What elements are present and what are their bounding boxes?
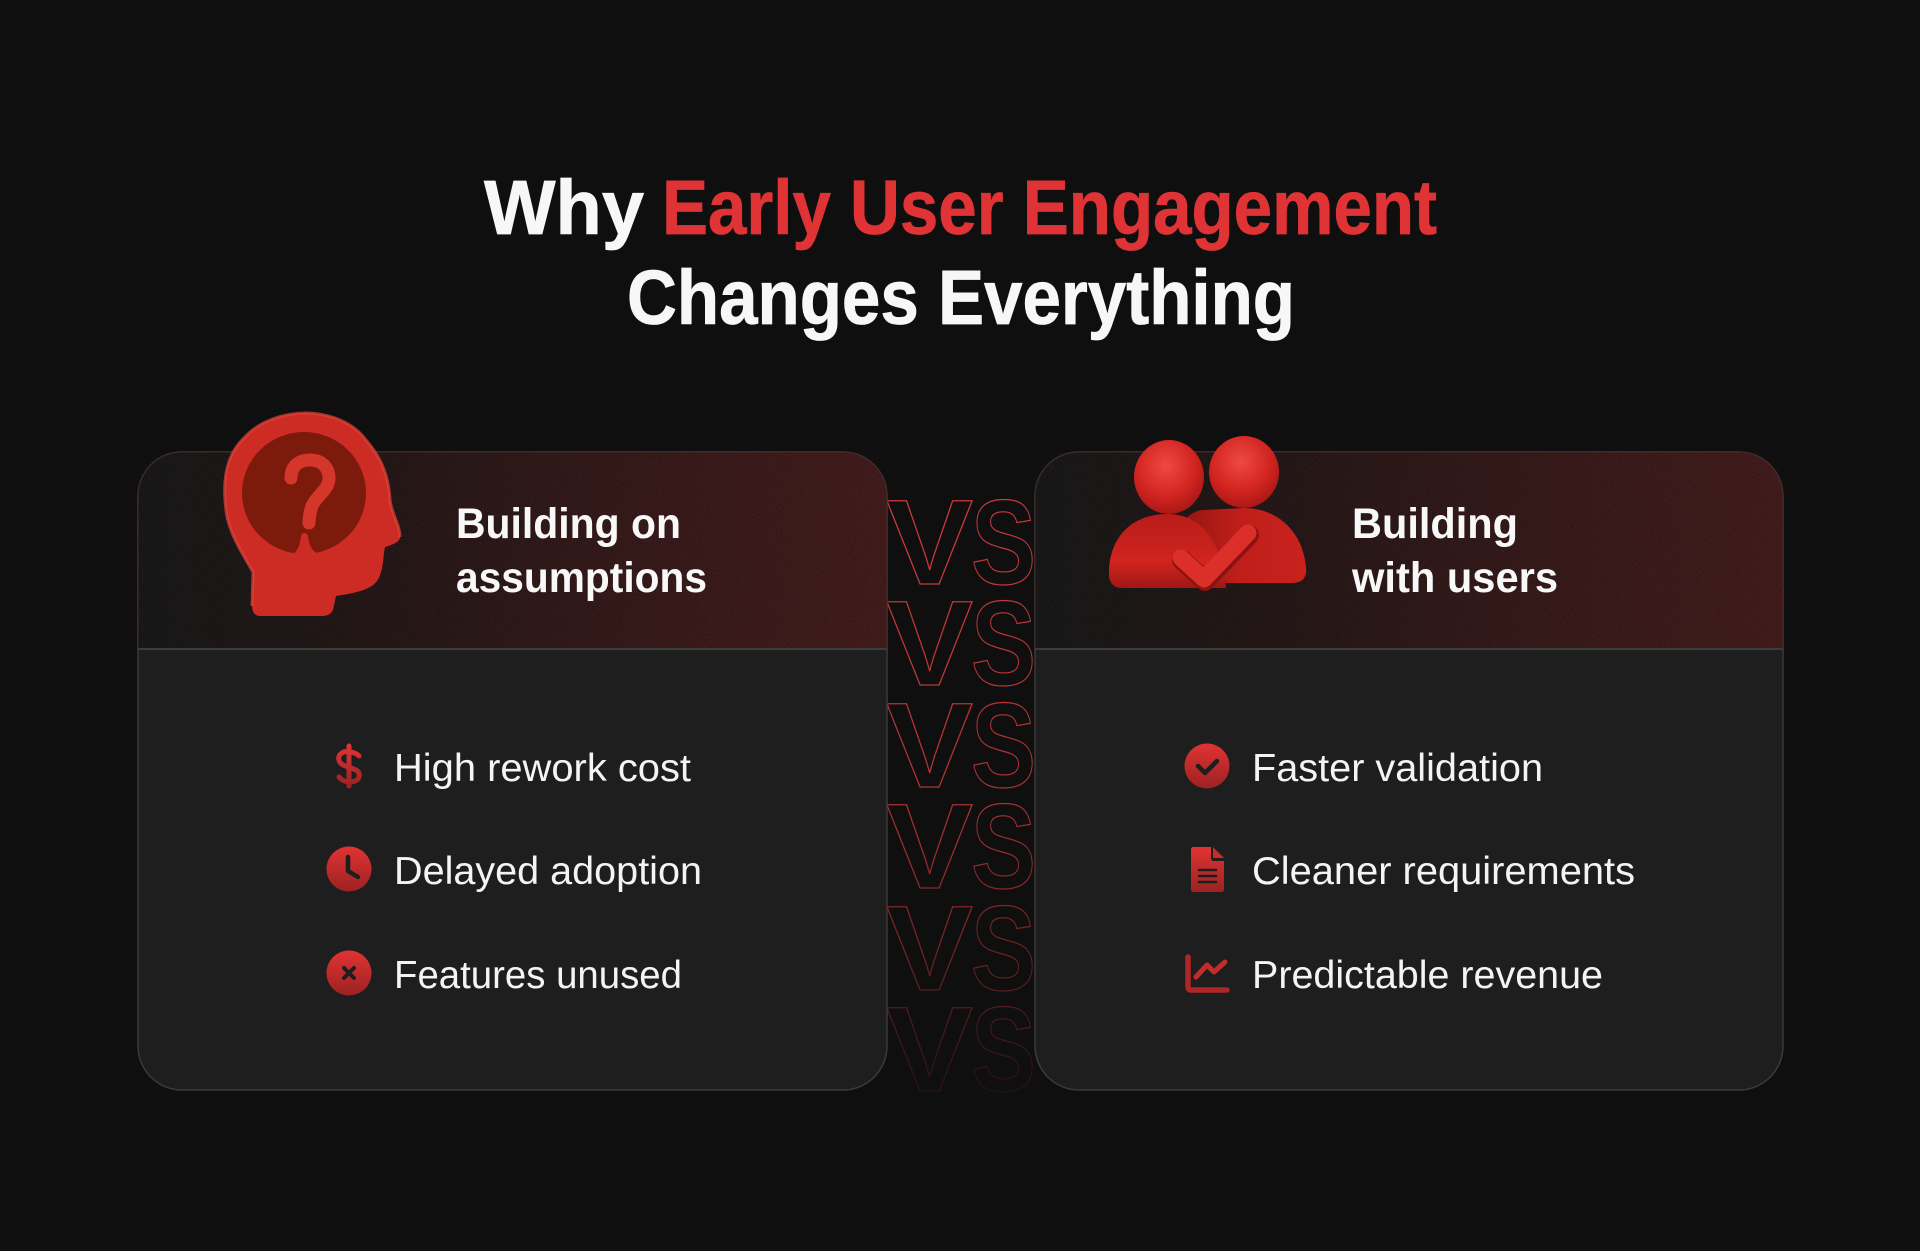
VS column: S	[971, 778, 1036, 914]
card body	[1035, 452, 1783, 1090]
item: delayed adoption: Delayed adoption	[394, 850, 702, 893]
icon: line chart	[1188, 957, 1227, 990]
VS column: V	[886, 575, 973, 711]
VS column: S	[971, 981, 1036, 1117]
card header	[138, 452, 887, 650]
card body	[138, 452, 887, 1090]
card header	[1035, 452, 1783, 650]
VS column: S	[971, 677, 1036, 813]
title: Changes Everything	[627, 255, 1295, 341]
title: Why	[484, 165, 644, 251]
item: faster validation: Faster validation	[1252, 747, 1543, 790]
item: features unused: Features unused	[394, 954, 682, 997]
panel heading: Building	[1352, 500, 1518, 548]
VS column: V	[886, 677, 973, 813]
panel heading: with users	[1351, 554, 1558, 602]
panel heading: assumptions	[456, 554, 707, 602]
icon: document	[1191, 847, 1224, 892]
VS column: V	[886, 880, 973, 1016]
panel: building with users	[1035, 436, 1783, 1090]
item: predictable revenue: Predictable revenue	[1252, 954, 1603, 997]
VS column: S	[971, 474, 1036, 610]
icon: clock	[326, 846, 372, 892]
panel heading	[1351, 500, 1558, 602]
VS column: V	[886, 778, 973, 914]
panel heading: Building on	[456, 500, 681, 548]
panel: building on assumptions	[138, 413, 887, 1090]
icon: two users with check	[1109, 436, 1306, 588]
VS column: S	[971, 880, 1036, 1016]
icon: dollar	[339, 746, 359, 786]
item: cleaner requirements: Cleaner requirements	[1252, 850, 1635, 893]
title: Early User Engagement	[662, 165, 1437, 251]
icon: cross	[326, 950, 372, 996]
icon: check circle	[1184, 744, 1230, 788]
title	[484, 165, 1437, 341]
VS column: S	[971, 575, 1036, 711]
VS column: V	[886, 474, 973, 610]
panel heading	[456, 500, 707, 602]
icon: head with question mark	[225, 413, 400, 616]
item: high rework cost: High rework cost	[394, 747, 691, 790]
VS column	[886, 474, 1036, 1117]
VS column: V	[886, 981, 973, 1117]
